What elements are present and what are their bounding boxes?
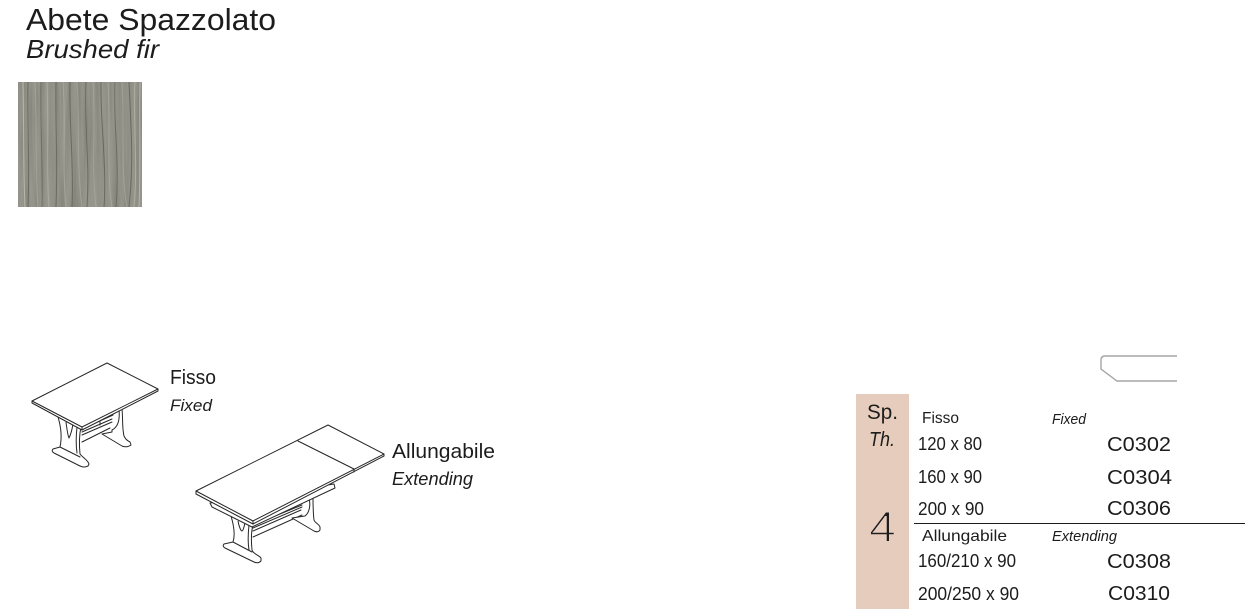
extending table legs and stretcher: [223, 497, 320, 563]
size table: fixed group: 160 x 90: [918, 467, 982, 487]
subtitle: Brushed fir: [26, 34, 160, 64]
size table: extending group: Allungabile: [922, 528, 1007, 545]
thickness value: 4: [869, 503, 896, 552]
size table: fixed group: C0306: [1107, 498, 1171, 520]
size table: extending group: C0308: [1107, 551, 1171, 573]
size table: extending group: Extending: [1052, 529, 1117, 545]
size table: fixed group: C0302: [1107, 434, 1171, 456]
label translation: extending: Extending: [392, 469, 473, 489]
size table: fixed group: C0304: [1107, 467, 1172, 489]
label translation: fixed: Fixed: [170, 396, 213, 415]
panel: thickness column: [856, 394, 909, 609]
label: fixed: [170, 367, 216, 415]
table legs and stretcher: [52, 409, 131, 467]
title: [26, 2, 276, 64]
label: extending: [392, 441, 495, 489]
thickness label translation: Th.: [869, 429, 895, 451]
title: Abete Spazzolato: [26, 2, 276, 37]
size table: fixed group: 120 x 80: [918, 434, 982, 454]
extending table top: [196, 425, 384, 524]
size table: fixed group: [918, 410, 1172, 520]
icon: edge profile: [1101, 356, 1177, 381]
thickness label: Sp.: [867, 401, 898, 424]
label: extending: Allungabile: [392, 441, 495, 463]
size table: extending group: 200/250 x 90: [918, 584, 1019, 604]
label: fixed: Fisso: [170, 367, 216, 389]
size table: fixed group: Fixed: [1052, 412, 1087, 428]
table top: [32, 363, 158, 430]
size table: extending group: 160/210 x 90: [918, 551, 1016, 571]
size table: extending group: C0310: [1108, 583, 1170, 605]
illustration: extending table: [196, 425, 384, 563]
extending table apron: [210, 484, 335, 527]
size table: extending group: [918, 528, 1171, 605]
size table: fixed group: 200 x 90: [918, 499, 984, 519]
material swatch: brushed fir: [18, 82, 142, 207]
illustration: fixed table: [32, 363, 158, 467]
size table: fixed group: Fisso: [922, 410, 959, 427]
